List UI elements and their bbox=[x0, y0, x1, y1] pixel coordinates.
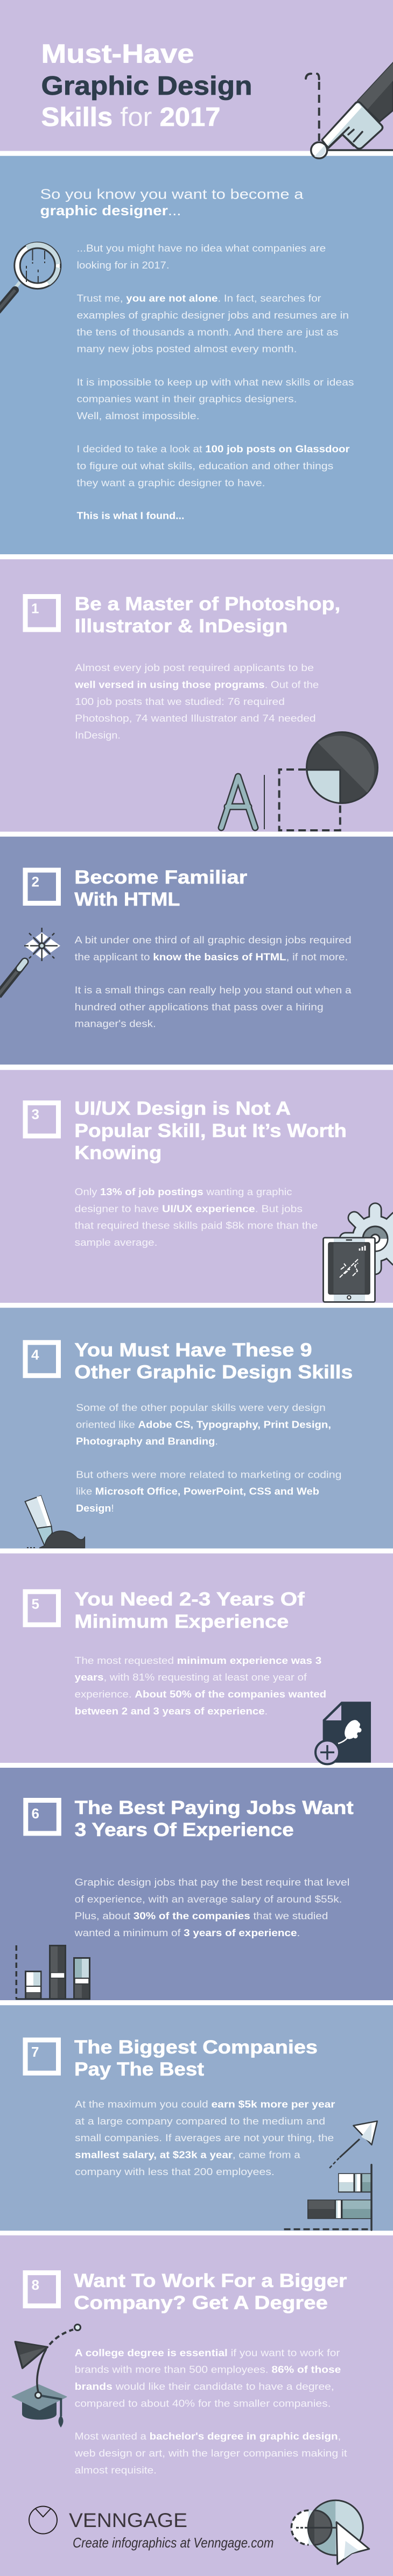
number badge 3 bbox=[25, 1103, 58, 1136]
icon: hand holding pen tool bbox=[306, 63, 393, 158]
intro text block: looking for in 2017. bbox=[76, 259, 169, 271]
body text 7: company with less that 200 employees. bbox=[75, 2166, 275, 2177]
intro text block: ...But you might have no idea what companies are bbox=[76, 243, 326, 254]
body text 7: at a large company compared to the medium and bbox=[75, 2115, 325, 2127]
heading 6: 3 Years Of Experience bbox=[75, 1819, 294, 1840]
body text 2: A bit under one third of all graphic design jobs required bbox=[75, 934, 352, 945]
heading 5 bbox=[74, 1589, 305, 1632]
logo: venngage: VENNGAGE bbox=[69, 2509, 187, 2531]
heading 2: Become Familiar bbox=[74, 867, 248, 888]
number badge 3: 3 bbox=[31, 1106, 39, 1122]
heading 4 bbox=[74, 1340, 353, 1383]
body text 7: smallest salary, at $23k a year , came from a bbox=[75, 2149, 300, 2161]
number badge 2 bbox=[25, 870, 58, 903]
intro text block: to figure out what skills, education and other things bbox=[76, 460, 333, 471]
body text 8 bbox=[74, 2347, 347, 2475]
heading 1: Illustrator & InDesign bbox=[75, 616, 287, 637]
body text 3: sample average. bbox=[75, 1237, 157, 1248]
intro text block: examples of graphic designer jobs and resumes are in bbox=[76, 309, 349, 321]
body text 1 bbox=[74, 662, 319, 741]
icon: document with leaf and plus bbox=[315, 1702, 371, 1764]
panel: skill 6 best paying bbox=[0, 1768, 393, 2000]
body text 4: Design! bbox=[76, 1502, 114, 1514]
title: Skills for 2017 bbox=[41, 103, 221, 132]
body text 1: InDesign. bbox=[75, 730, 121, 741]
intro text block: many new jobs posted almost every month. bbox=[76, 343, 297, 355]
heading 7 bbox=[74, 2037, 318, 2080]
intro text block: This is what I found... bbox=[76, 510, 184, 521]
intro heading: graphic designer ... bbox=[40, 202, 181, 218]
icon: magic wand bbox=[0, 928, 60, 996]
number badge 5 bbox=[25, 1592, 58, 1625]
icon: gear and tablet bbox=[323, 1209, 393, 1302]
body text 2: manager's desk. bbox=[75, 1018, 156, 1029]
number badge 1 bbox=[25, 596, 58, 630]
panel: intro bbox=[0, 156, 393, 554]
panel: skill 1 photoshop bbox=[0, 559, 393, 832]
body text 4: oriented like Adobe CS, Typography, Print Design, bbox=[76, 1418, 331, 1430]
body text 3: designer to have UI/UX experience . But jobs bbox=[75, 1203, 303, 1214]
intro heading bbox=[40, 186, 304, 218]
panel: skill 4 other skills bbox=[0, 1308, 393, 1549]
heading 6 bbox=[75, 1797, 354, 1840]
body text 5: years , with 81% requesting at least one year of bbox=[75, 1671, 307, 1683]
number badge 5: 5 bbox=[31, 1596, 39, 1612]
heading 3: Popular Skill, But It’s Worth bbox=[74, 1120, 347, 1141]
body text 2: hundred other applications that pass over a hiring bbox=[75, 1001, 324, 1012]
body text 1: Almost every job post required applicants to be bbox=[75, 662, 314, 673]
panel: skill 2 html bbox=[0, 837, 393, 1064]
icon: letter A and shapes bbox=[221, 732, 378, 830]
heading 3: UI/UX Design is Not A bbox=[74, 1098, 291, 1119]
icon: horizontal bars with arrow bbox=[284, 2121, 377, 2230]
body text 8: almost requisite. bbox=[75, 2464, 157, 2475]
body text 2: the applicant to know the basics of HTML , if not more. bbox=[75, 951, 348, 962]
heading 8: Want To Work For a Bigger bbox=[74, 2270, 347, 2291]
panel: skill 7 biggest companies bbox=[0, 2005, 393, 2231]
number badge 7: 7 bbox=[31, 2044, 39, 2060]
body text 5: between 2 and 3 years of experience . bbox=[75, 1705, 268, 1717]
intro text block: they want a graphic designer to have. bbox=[76, 477, 265, 488]
title: Must-Have bbox=[41, 40, 194, 69]
body text 3: that required these skills paid $8k more than the bbox=[75, 1220, 318, 1231]
body text 1: 100 job posts that we studied: 76 required bbox=[75, 696, 285, 707]
body text 7: At the maximum you could earn $5k more per year bbox=[75, 2099, 335, 2109]
number badge 8 bbox=[25, 2273, 58, 2306]
body text 7: small companies. If averages are not your thing, the bbox=[75, 2132, 334, 2143]
heading 7: The Biggest Companies bbox=[74, 2037, 318, 2058]
body text 4 bbox=[76, 1402, 342, 1514]
heading 5: Minimum Experience bbox=[74, 1611, 289, 1632]
heading 8 bbox=[74, 2270, 347, 2313]
body text 2 bbox=[75, 934, 352, 1029]
body text 5: experience. About 50% of the companies wanted bbox=[75, 1689, 326, 1700]
intro heading: So you know you want to become a bbox=[40, 186, 304, 202]
number badge 4 bbox=[25, 1343, 58, 1375]
body text 6 bbox=[74, 1876, 349, 1938]
body text 4: But others were more related to marketing or coding bbox=[76, 1469, 342, 1480]
body text 6: of experience, with an average salary of around $55k. bbox=[75, 1893, 342, 1904]
body text 4: Some of the other popular skills were very design bbox=[76, 1402, 326, 1413]
intro text block: companies want in their graphics designers. bbox=[76, 393, 297, 405]
number badge 7 bbox=[25, 2040, 58, 2073]
body text 8: brands would like their candidate to have a degree, bbox=[75, 2381, 334, 2392]
body text 1: well versed in using those programs . Out of the bbox=[74, 679, 319, 690]
icon: paint brush and blob bbox=[25, 1496, 85, 1548]
number badge 2: 2 bbox=[31, 874, 39, 890]
body text 5: The most requested minimum experience was 3 bbox=[75, 1655, 321, 1666]
body text 4: like Microsoft Office, PowerPoint, CSS and Web bbox=[76, 1486, 319, 1497]
body text 6: Plus, about 30% of the companies that we studied bbox=[75, 1910, 328, 1922]
heading 5: You Need 2-3 Years Of bbox=[74, 1589, 305, 1610]
body text 6: wanted a minimum of 3 years of experience . bbox=[74, 1927, 300, 1938]
intro text block bbox=[76, 243, 354, 521]
logo: venngage bbox=[29, 2507, 273, 2551]
heading 6: The Best Paying Jobs Want bbox=[75, 1797, 354, 1818]
body text 8: compared to about 40% for the smaller companies. bbox=[75, 2398, 331, 2409]
icon: venn diagram with cursor bbox=[291, 2500, 369, 2564]
title bbox=[41, 40, 252, 132]
heading 8: Company? Get A Degree bbox=[74, 2292, 328, 2313]
intro text block: Well, almost impossible. bbox=[76, 410, 199, 421]
intro text block: It is impossible to keep up with what new skills or ideas bbox=[76, 376, 354, 387]
panel: hero title bbox=[0, 0, 393, 151]
panel: skill 3 ui/ux bbox=[0, 1070, 393, 1303]
icon: graduation cap with paper plane bbox=[12, 2325, 81, 2427]
heading 1: Be a Master of Photoshop, bbox=[75, 594, 340, 615]
logo: venngage: Create infographics at Venngage.com bbox=[73, 2535, 273, 2551]
icon: magnifying glass bbox=[0, 242, 61, 310]
body text 7 bbox=[75, 2099, 335, 2177]
body text 4: Photography and Branding . bbox=[76, 1436, 218, 1447]
heading 7: Pay The Best bbox=[74, 2059, 204, 2080]
heading 4: You Must Have These 9 bbox=[74, 1340, 312, 1360]
intro text block: the tens of thousands a month. And there are just as bbox=[76, 327, 338, 338]
number badge 8: 8 bbox=[31, 2277, 39, 2293]
heading 3: Knowing bbox=[74, 1142, 162, 1163]
body text 3: Only 13% of job postings wanting a graphic bbox=[75, 1186, 292, 1197]
body text 6: Graphic design jobs that pay the best require that level bbox=[75, 1876, 349, 1888]
intro text block: I decided to take a look at 100 job posts on Glassdoor bbox=[76, 443, 350, 455]
number badge 6 bbox=[26, 1801, 59, 1833]
panel: skill 8 degree bbox=[0, 2235, 393, 2576]
icon: bar chart bbox=[16, 1945, 90, 1999]
heading 2: With HTML bbox=[74, 889, 180, 910]
body text 8: Most wanted a bachelor's degree in graphic design , bbox=[75, 2431, 341, 2442]
body text 1: Photoshop, 74 wanted Illustrator and 74 needed bbox=[75, 712, 316, 724]
heading 3 bbox=[74, 1098, 347, 1163]
body text 3 bbox=[75, 1186, 318, 1248]
intro text block: Trust me, you are not alone . In fact, searches for bbox=[76, 293, 321, 304]
title: Graphic Design bbox=[41, 72, 252, 101]
body text 5 bbox=[75, 1655, 326, 1717]
number badge 4: 4 bbox=[31, 1346, 39, 1363]
body text 8: web design or art, with the larger companies making it bbox=[74, 2447, 347, 2459]
body text 8: A college degree is essential if you want to work for bbox=[75, 2347, 340, 2358]
heading 1 bbox=[75, 594, 340, 637]
number badge 1: 1 bbox=[31, 601, 39, 617]
number badge 6: 6 bbox=[31, 1805, 39, 1822]
panel: skill 5 experience bbox=[0, 1554, 393, 1764]
heading 4: Other Graphic Design Skills bbox=[74, 1361, 353, 1383]
heading 2 bbox=[74, 867, 248, 910]
body text 8: brands with more than 500 employees. 86% of those bbox=[75, 2364, 341, 2375]
body text 2: It is a small things can really help you stand out when a bbox=[75, 984, 352, 996]
